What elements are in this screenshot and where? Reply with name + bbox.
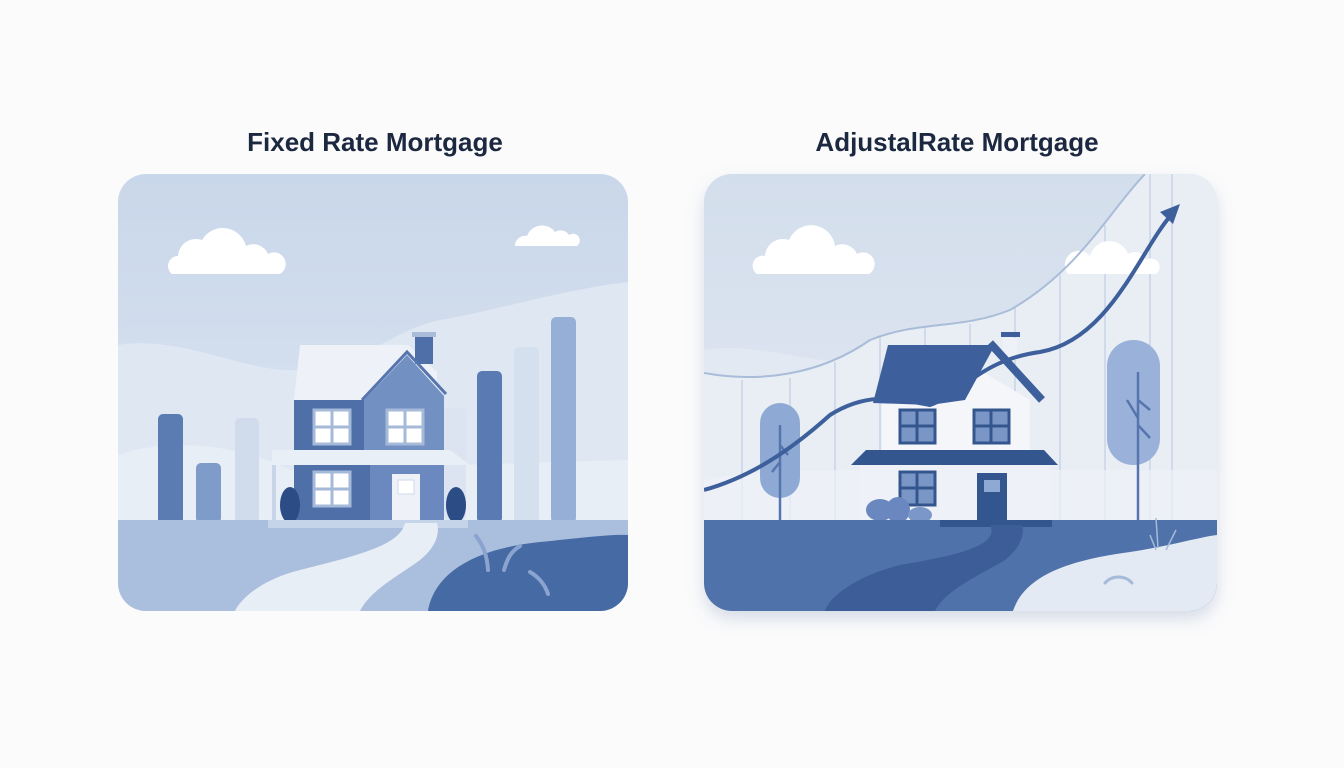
house (272, 332, 470, 523)
trees (760, 340, 1160, 520)
bars (158, 414, 183, 524)
path (235, 523, 438, 611)
ground (704, 520, 1217, 611)
title: fixed rate: Fixed Rate Mortgage (247, 127, 503, 157)
title: adjustable rate: AdjustalRate Mortgage (815, 127, 1099, 157)
clouds (168, 225, 580, 274)
hills (118, 282, 628, 452)
path (825, 525, 1023, 611)
dark hill (428, 535, 628, 611)
ground (118, 520, 628, 611)
hills (704, 348, 828, 376)
rate area under curve (834, 174, 1217, 362)
panel: fixed rate illustration (118, 174, 628, 611)
light hill (1013, 535, 1217, 611)
rising rate arrow (704, 204, 1180, 490)
house (851, 332, 1058, 523)
clouds (753, 225, 1160, 274)
panel: adjustable rate illustration (704, 174, 1217, 611)
